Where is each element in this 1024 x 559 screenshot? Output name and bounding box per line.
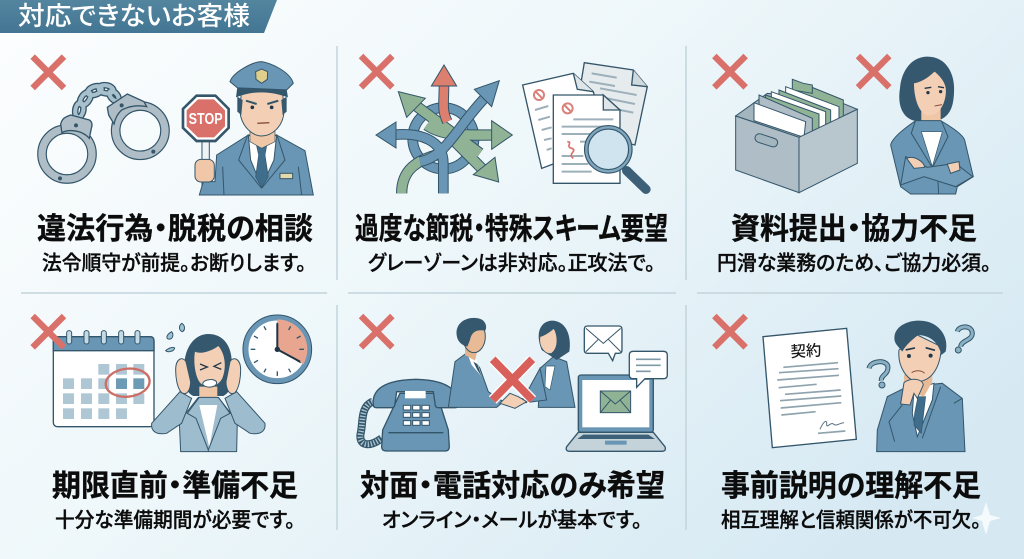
icon: laptop and messages — [566, 326, 667, 451]
icon: police officer — [195, 62, 313, 195]
panel: in person and phone only — [360, 316, 667, 532]
panel: lack of documents and cooperation — [714, 56, 991, 275]
heading: excessive tax saving: 過度な節税・特殊スキーム要望 — [355, 213, 668, 246]
heading: in person only: 対面・電話対応のみ希望 — [360, 470, 665, 503]
heading: lack of understanding: 事前説明の理解不足 — [721, 470, 981, 503]
heading: last minute: 期限直前・準備不足 — [52, 470, 298, 503]
icon: red cross — [33, 57, 64, 88]
icon: file box — [736, 79, 857, 193]
icon: documents with magnifier — [523, 63, 647, 189]
icon: stop sign — [182, 94, 230, 190]
text: legal compliance: 法令順守が前提。お断りします。 — [42, 252, 306, 275]
icon: contract — [763, 328, 856, 448]
text: gray zone: グレーゾーンは非対応。正攻法で。 — [368, 252, 655, 275]
text: online and email: オンライン・メールが基本です。 — [382, 509, 642, 532]
heading: illegal acts: 違法行為・脱税の相談 — [37, 213, 313, 246]
icon: tangled arrows — [376, 65, 512, 193]
icon: red cross — [714, 316, 746, 347]
text: mutual trust: 相互理解と信頼関係が不可欠。 — [721, 509, 981, 532]
text: preparation period: 十分な準備期間が必要です。 — [55, 509, 295, 532]
text: cooperation required: 円滑な業務のため、ご協力必須。 — [717, 252, 991, 275]
header banner: 対応できないお客様 — [18, 1, 250, 31]
icon: red cross — [33, 316, 64, 347]
icon: handshaking people — [448, 318, 575, 407]
icon: red cross — [361, 56, 392, 87]
panel: excessive tax saving — [355, 56, 668, 275]
icon: woman with crossed arms — [891, 57, 973, 194]
icon: clock — [243, 315, 312, 384]
panel: lack of understanding — [714, 316, 981, 532]
heading: lack of cooperation: 資料提出・協力不足 — [731, 213, 977, 246]
icon: panicked woman — [152, 323, 265, 452]
icon: red cross — [361, 316, 392, 347]
icon: calendar — [53, 331, 154, 427]
icon: sparkle — [972, 502, 1001, 535]
icon: confused man — [869, 321, 972, 452]
icon: large red cross over handshake — [493, 359, 532, 408]
panel: illegal acts and tax evasion — [33, 57, 313, 275]
icon: stop sign: STOP — [189, 111, 223, 128]
icon: handcuffs — [42, 84, 165, 180]
icon: telephone — [360, 379, 458, 451]
icon: red crosses — [714, 56, 889, 87]
panel: last minute requests — [33, 315, 312, 532]
icon: contract: 契約 — [790, 343, 822, 361]
